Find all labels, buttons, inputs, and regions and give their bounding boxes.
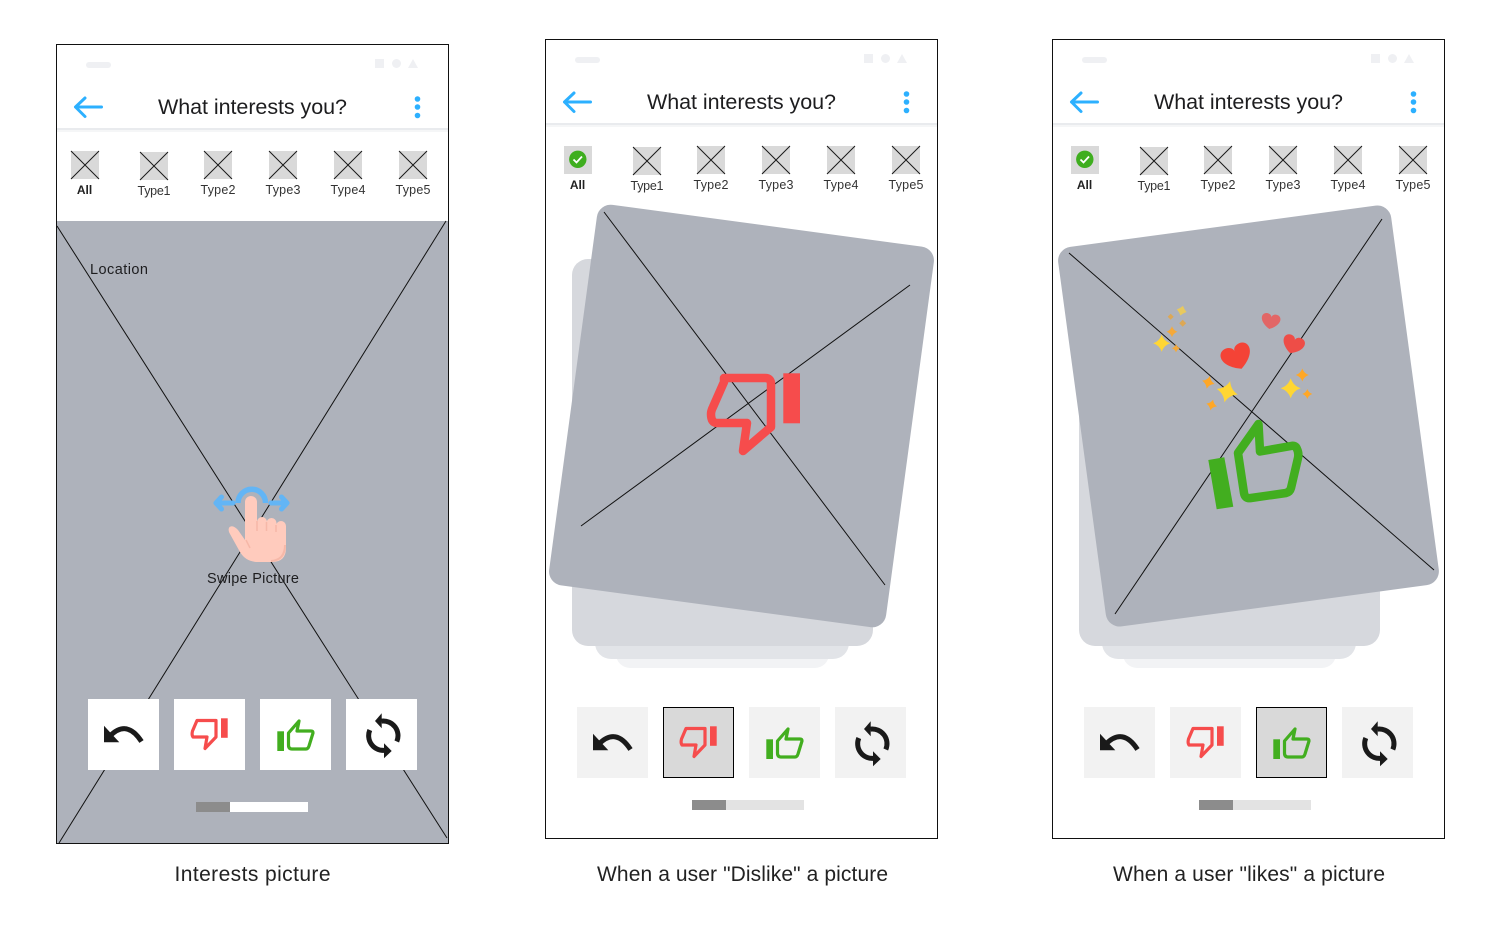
category row: Type4 [330,183,366,197]
card stack [572,259,873,668]
category row: Type2 [1200,178,1236,192]
tilted picture card [1056,204,1441,628]
caption: interests picture: Interests picture [174,863,330,886]
progress bar [692,800,804,810]
progress bar [196,802,308,812]
category row: Type5 [396,183,431,197]
panel: like phone [1052,40,1444,838]
category row: Type3 [266,183,301,197]
icon: back arrow [76,98,102,116]
icon: back arrow [564,93,590,112]
caption: likes: When a user "likes" a picture [1113,863,1385,886]
heading: app bar title: What interests you? [1154,90,1343,114]
heading: app bar title: What interests you? [647,90,836,114]
category row: Type3 [758,178,794,192]
category row: Type1 [630,179,664,193]
icon: more menu [1411,91,1416,113]
category row: Type1 [1138,179,1171,193]
category row: Type4 [824,178,859,192]
action buttons [88,699,417,770]
icon: more menu [415,96,420,118]
heading: app bar title: What interests you? [158,95,347,119]
category row: Type1 [138,184,171,198]
category row: All [1077,178,1092,192]
category row: Type2 [200,183,236,197]
category row: All [77,183,92,197]
category row: All [570,178,585,192]
tilted picture card [547,203,936,629]
category row: Type2 [694,178,729,192]
icon: more menu [904,91,909,113]
icon: back arrow [1072,93,1098,112]
panel: interests picture phone [56,44,448,844]
text: location: Location [90,262,148,278]
category row: Type5 [1396,178,1431,192]
caption: dislike: When a user "Dislike" a picture [597,863,888,886]
text: swipe picture: Swipe Picture [207,571,299,587]
progress bar [1199,800,1311,810]
icon: swipe hand [216,489,287,562]
icon: large thumbs down [711,373,800,451]
category row [1071,146,1431,193]
category row: Type4 [1330,178,1366,192]
category row: Type3 [1266,178,1301,192]
category row: Type5 [888,178,924,192]
card stack [1079,259,1380,668]
status bar icons [1082,54,1414,63]
icon: large thumbs up [1208,424,1298,509]
panel: dislike phone [546,40,938,838]
category row [71,151,431,198]
sparkles and hearts [1153,305,1312,412]
picture placeholder [57,221,448,843]
status bar icons [86,59,418,68]
action buttons [1084,707,1413,778]
status bar icons [575,54,907,63]
action buttons [577,707,906,778]
category row [564,146,924,193]
